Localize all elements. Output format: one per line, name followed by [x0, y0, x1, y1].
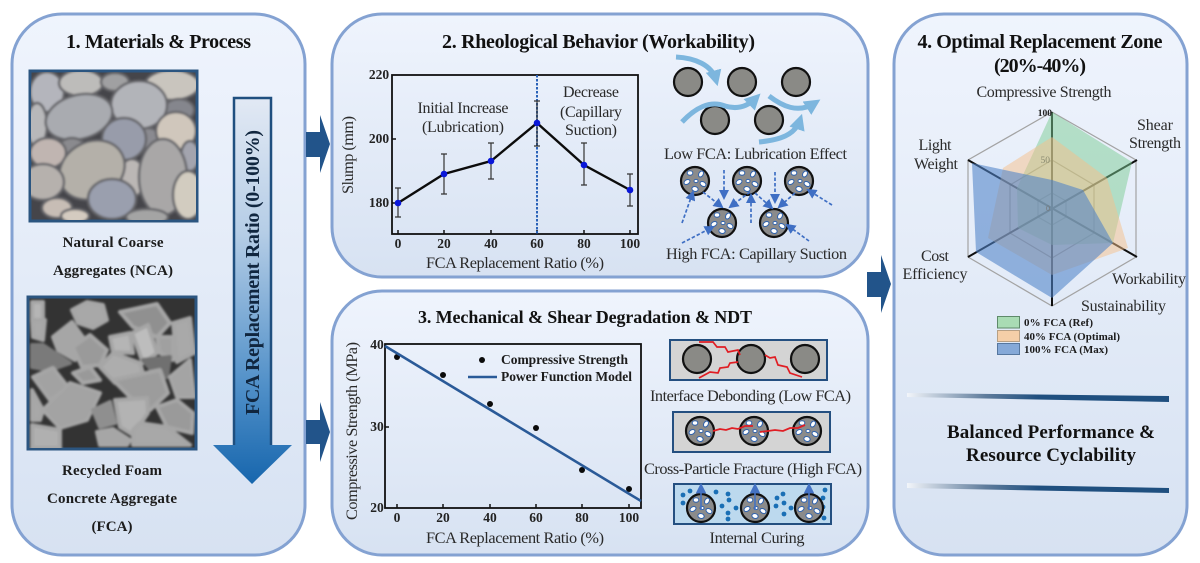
- radar legend: 0% FCA (Ref): [1024, 317, 1093, 329]
- chart: slump vs replacement ratio: 180: [369, 195, 389, 210]
- diagram: cross-particle fracture: [644, 412, 862, 478]
- chart: slump vs replacement ratio: Initial Increase: [418, 100, 508, 117]
- chart: slump vs replacement ratio: (Capillary: [560, 104, 622, 121]
- chart: slump vs replacement ratio: (Lubrication): [422, 119, 504, 136]
- chart: compressive strength vs replacement ratio: 40: [483, 510, 497, 525]
- arrow: FCA replacement ratio: [213, 98, 292, 484]
- radar chart: Cost: [921, 248, 950, 265]
- chart: compressive strength vs replacement ratio: 20: [436, 510, 450, 525]
- chart: compressive strength vs replacement ratio: Power Function Model: [501, 369, 632, 384]
- diagram: cross-particle fracture: Cross-Particle Fracture (High FCA): [644, 459, 862, 478]
- heading: optimal replacement zone: (20%-40%): [994, 55, 1086, 77]
- diagram: low FCA lubrication effect: Low FCA: Lubrication Effect: [664, 144, 847, 163]
- chart: compressive strength vs replacement ratio: 40: [370, 337, 384, 352]
- chart: compressive strength vs replacement ratio: 0: [394, 510, 401, 525]
- heading: rheological behavior: 2. Rheological Behavior (Workability): [442, 31, 755, 53]
- chart: slump vs replacement ratio: FCA Replacement Ratio (%): [426, 253, 604, 272]
- caption: recycled foam concrete aggregate: Concrete Aggregate: [47, 491, 177, 507]
- radar chart: Light: [918, 137, 952, 154]
- radar chart: 50: [1040, 156, 1050, 166]
- radar chart: [902, 84, 1186, 315]
- chart: slump vs replacement ratio: 80: [577, 236, 591, 251]
- chart: slump vs replacement ratio: 60: [530, 236, 544, 251]
- heading: mechanical and shear degradation: 3. Mechanical & Shear Degradation & NDT: [418, 307, 752, 327]
- panel: mechanical and shear degradation: [332, 291, 868, 555]
- caption: natural coarse aggregates: [53, 235, 173, 279]
- radar chart: 0: [1046, 204, 1050, 213]
- radar legend: [998, 316, 1120, 356]
- photo: natural coarse aggregates: [22, 70, 203, 225]
- chart: compressive strength vs replacement ratio: 30: [370, 419, 384, 434]
- chart: compressive strength vs replacement ratio: FCA Replacement Ratio (%): [426, 528, 604, 547]
- chart: slump vs replacement ratio: 20: [437, 236, 451, 251]
- chart: slump vs replacement ratio: Suction): [565, 122, 617, 139]
- diagram: high FCA capillary suction: [666, 167, 847, 263]
- radar legend: 100% FCA (Max): [1024, 344, 1108, 356]
- radar chart: Strength: [1129, 135, 1181, 152]
- radar chart: 100: [1038, 109, 1052, 119]
- caption: recycled foam concrete aggregate: (FCA): [92, 519, 132, 535]
- diagram: low FCA lubrication effect: [664, 57, 847, 163]
- radar chart: Shear: [1137, 117, 1174, 134]
- arrow: results to optimal zone: [867, 255, 891, 313]
- caption: natural coarse aggregates: Aggregates (NCA): [53, 263, 173, 279]
- chart: slump vs replacement ratio: Decrease: [563, 84, 619, 101]
- chart: compressive strength vs replacement ratio: 60: [529, 510, 543, 525]
- chart: compressive strength vs replacement ratio: [342, 337, 641, 547]
- arrow: materials to mechanical: [306, 402, 330, 462]
- diagram: internal curing: [674, 484, 831, 547]
- caption: recycled foam concrete aggregate: Recycled Foam: [62, 463, 162, 479]
- caption: recycled foam concrete aggregate: [47, 463, 177, 535]
- heading: optimal replacement zone: 4. Optimal Replacement Zone: [918, 31, 1163, 53]
- radar chart: Sustainability: [1081, 298, 1166, 315]
- heading: materials and process: 1. Materials & Process: [66, 31, 251, 53]
- photo: recycled foam concrete aggregate: [28, 297, 196, 449]
- chart: slump vs replacement ratio: Slump (mm): [338, 116, 357, 194]
- chart: slump vs replacement ratio: 100: [620, 236, 640, 251]
- diagram: internal curing: Internal Curing: [710, 528, 804, 547]
- chart: slump vs replacement ratio: 0: [395, 236, 402, 251]
- panel: rheological behavior: [332, 14, 868, 277]
- chart: compressive strength vs replacement ratio: Compressive Strength (MPa): [342, 342, 361, 520]
- heading: optimal replacement zone: [918, 31, 1163, 77]
- radar legend: 40% FCA (Optimal): [1024, 331, 1120, 343]
- diagram: high FCA capillary suction: High FCA: Capillary Suction: [666, 244, 847, 263]
- caption: natural coarse aggregates: Natural Coarse: [62, 235, 164, 251]
- chart: compressive strength vs replacement ratio: Compressive Strength: [501, 352, 628, 367]
- chart: slump vs replacement ratio: 220: [369, 67, 389, 82]
- conclusion text: Resource Cyclability: [966, 445, 1136, 466]
- radar chart: Weight: [914, 156, 959, 173]
- radar chart: Workability: [1112, 271, 1186, 288]
- chart: slump vs replacement ratio: 40: [484, 236, 498, 251]
- panel: materials and process: [12, 14, 305, 555]
- diagram: interface debonding: Interface Debonding (Low FCA): [650, 386, 851, 405]
- chart: compressive strength vs replacement ratio: 100: [619, 510, 639, 525]
- chart: compressive strength vs replacement ratio: 20: [370, 500, 384, 515]
- conclusion text: [947, 422, 1155, 466]
- chart: slump vs replacement ratio: 200: [369, 131, 389, 146]
- radar chart: Compressive Strength: [976, 84, 1112, 101]
- arrow: FCA replacement ratio: FCA Replacement Ratio (0-100%): [242, 130, 264, 415]
- chart: slump vs replacement ratio: [338, 67, 640, 272]
- radar chart: Efficiency: [902, 266, 968, 283]
- panel: optimal replacement zone: [894, 14, 1187, 555]
- chart: compressive strength vs replacement ratio: 80: [575, 510, 589, 525]
- diagram: interface debonding: [650, 340, 851, 405]
- conclusion text: Balanced Performance &: [947, 422, 1155, 443]
- arrow: materials to rheology: [306, 115, 330, 173]
